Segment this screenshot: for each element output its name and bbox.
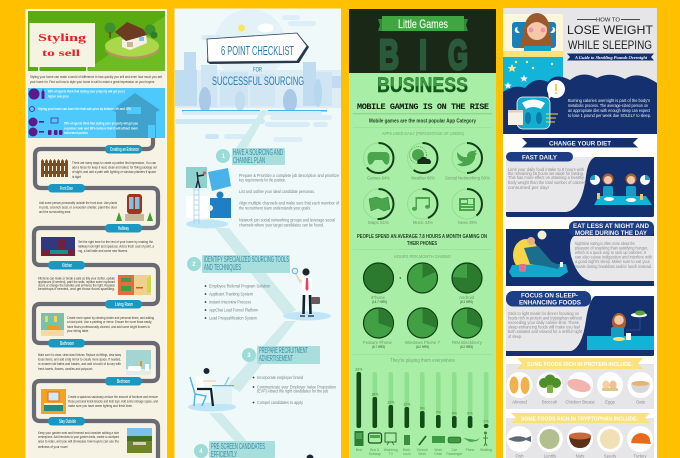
- header dark: Little Games: [398, 17, 448, 31]
- step 1: 1: [222, 154, 226, 160]
- intro copy: Burning calories overnight is part of the body's: [568, 98, 650, 103]
- step 2: AppChat Load Funnel Platform: [209, 308, 258, 312]
- chart: playing everywhere bars: 9%: [420, 406, 426, 410]
- step 4: PRE-SCREEN CANDIDATES: [211, 442, 265, 451]
- section ribbon: CHANGE YOUR DIET: [549, 140, 611, 148]
- chart: playing everywhere bars: 12%: [403, 402, 411, 406]
- chart: playing everywhere bars: Work: [418, 452, 427, 456]
- section labels: Creating an Entrance: [110, 147, 139, 153]
- step 1: key requirements for the position.: [239, 178, 286, 182]
- title: HOW TO: [596, 18, 621, 24]
- card: fast daily: consumed per day!: [508, 185, 549, 190]
- chart: apps used daily rings: Games 64%: [367, 176, 390, 180]
- stats band: Styling your home can lower the final sale price by between 5% and 10%: [38, 106, 131, 111]
- icon: gamepad: [368, 152, 390, 165]
- block: kitchen: [38, 275, 151, 295]
- chart: apps used daily rings: News 39%: [458, 220, 477, 225]
- chart: playing everywhere bars: Work: [434, 448, 443, 452]
- step 2: [187, 255, 290, 320]
- title: A Guide to Shedding Pounds Overnight: [574, 55, 648, 60]
- stats band: higher sale price: [48, 94, 70, 98]
- chart: hours per month pies: (8.3 HRS): [460, 300, 473, 304]
- section labels: Bedroom: [117, 379, 130, 385]
- icon: music note: [412, 197, 430, 211]
- panel: 6 point checklist: [174, 8, 341, 458]
- business title: Mobile games are the most popular App Category: [369, 118, 477, 124]
- card: eat less at night: can also cause indigestion and interfere with: [575, 254, 653, 260]
- block: bathroom: fresh towels, flowers, candles and potpourri.: [38, 366, 93, 371]
- icon: seeds: [600, 429, 620, 449]
- step 2: Lead Prequalification System: [209, 316, 257, 320]
- icon: man with magnifier and briefcase: [283, 268, 331, 320]
- block: entrance fence and text: There are many ways to create a positive first impression. You can: [72, 160, 156, 165]
- panel: styling to sell: [26, 9, 167, 458]
- section labels: Hallway: [118, 226, 129, 232]
- icon: turkey: [631, 433, 651, 444]
- protein foods: Almond: [512, 400, 527, 404]
- protein foods: Broccoli: [542, 400, 557, 404]
- card: eat less at night: pleasure of snacking than satisfying hunger,: [575, 246, 648, 250]
- stats band: a quicker sale and 80% believe that it will attract more: [64, 126, 139, 130]
- step 1: CHANNEL PLAN: [233, 156, 265, 165]
- section labels: Kitchen: [62, 263, 72, 269]
- chart: playing everywhere bars: 7%: [436, 410, 442, 414]
- card: fast daily: [506, 152, 654, 217]
- winding road: [34, 138, 158, 458]
- chart: playing everywhere bars: Desk: [434, 452, 442, 456]
- chart: hours per month pies: (14.7 HRS): [372, 300, 387, 304]
- protein foods: Eggs: [605, 400, 615, 404]
- block: living room: your dining table.: [67, 328, 89, 333]
- chart: hours per month pies: Android: [459, 295, 474, 300]
- step 1: Align multiple channels and make sure that each member of: [239, 200, 340, 206]
- chart: playing everywhere bars: Plane: [466, 448, 474, 452]
- step 3: 3: [247, 353, 251, 359]
- block: stay outside: [38, 428, 152, 453]
- icon: oats: [631, 381, 650, 393]
- step 2: Instant Interview Process: [209, 300, 251, 304]
- chart: playing everywhere bars: Bath-: [403, 448, 411, 452]
- chart: hours per month pies: (6.7 HRS): [372, 345, 385, 349]
- step 3: (EVP) Attract the right candidates for the job: [257, 388, 329, 394]
- card: eat less at night: a good night's sleep. Make sure to eat your: [575, 259, 651, 264]
- intro text: your home for. Find out how to style your home to sell to make a great impression on your buyers.: [30, 79, 155, 84]
- intro copy: [568, 98, 651, 118]
- chart: apps used daily rings: Music 44%: [413, 220, 433, 225]
- block: front door: [39, 194, 153, 221]
- section labels: Front Door: [60, 186, 73, 192]
- business title: MOBILE GAMING IS ON THE RISE: [357, 102, 489, 112]
- step 3: ADVERTISEMENT: [259, 354, 293, 363]
- icon: broccoli: [539, 374, 561, 393]
- protein foods: SOME FOODS RICH IN PROTEIN INCLUDE:: [527, 362, 633, 368]
- heading: hours gaming: [353, 234, 492, 259]
- protein foods: [506, 358, 654, 409]
- block: stay outside: centerpiece. Add benches to your garden beds, create a courtyard: [38, 434, 119, 439]
- block: stay outside: wellness of your room!: [38, 444, 68, 449]
- step 1: List and outline your ideal candidate personas.: [239, 189, 315, 194]
- block: hallway: [41, 237, 155, 256]
- card: sleep-enhancing foods: sleep-enhancing foods will make you feel: [508, 324, 580, 330]
- illustration: sleeping girl: [512, 13, 556, 51]
- header dark: G: [448, 31, 468, 78]
- step 1: Prepare & Prioritize a complete job description and prioritize: [239, 173, 340, 178]
- title: LOSE WEIGHT: [567, 23, 654, 37]
- block: living room: have floors professionally cleaned, and add some bright flowers to: [67, 324, 151, 329]
- intro copy: to lose 1 pound per week due SOLELY to sleep.: [568, 113, 651, 118]
- card: eat less at night: MORE DURING THE DAY: [575, 230, 648, 237]
- step 1: the recruitment team understands your goals.: [239, 206, 311, 210]
- business title: [353, 74, 492, 136]
- intro copy: metabolic process. The average-sized person on: [568, 103, 649, 108]
- block: entrance fence and text: of sight; and add a path with lighting or window planters if space: [72, 169, 157, 174]
- title banner: 6 POINT CHECKLIST: [221, 44, 294, 58]
- block: hallway: hallway look light and spacious. Add a fresh coat of paint, a: [78, 244, 155, 248]
- icons: location row: [354, 431, 488, 446]
- chart: playing everywhere bars: 18%: [371, 392, 379, 396]
- skyline illustration: [175, 9, 341, 142]
- card: sleep-enhancing foods: exceeding your daily calorie limit. These: [508, 320, 580, 325]
- block: stay outside: area to relax, and you will showcase how buyers can use the: [38, 438, 120, 444]
- path ribbons: [209, 110, 296, 458]
- block: bedroom: [41, 389, 159, 414]
- title banner: [207, 33, 309, 88]
- step 3: Communicate your Employer Value Proposition: [257, 384, 337, 390]
- block: hallway: rug, a hall table and some new flowers.: [78, 248, 128, 253]
- icon: chicken breast: [566, 377, 592, 394]
- chart: playing everywhere bars: Subway: [369, 452, 381, 456]
- bubble icon: [547, 80, 565, 99]
- step 3: [242, 346, 337, 405]
- chart: hours per month pies: Feature Phone: [363, 340, 392, 345]
- block: living room: Create more space by clearing clutter and personal items, and adding: [67, 315, 154, 320]
- intro text: [30, 74, 162, 84]
- section labels: Living Room: [115, 302, 133, 308]
- icon: nuts: [569, 436, 591, 448]
- stats band: 88% of agents think that styling your property will get you a: [48, 88, 126, 94]
- block: bathroom: Make sure it is clean; clean stand fixtures. Replace old fittings, clear away: [38, 352, 121, 357]
- title banner: FOR: [253, 68, 262, 74]
- step 3: Incorporate employer brand: [257, 375, 304, 380]
- business title: APPS USED DAILY (PERCENTAGE OF USERS): [382, 131, 464, 136]
- block: entrance fence and text: add a fence for keep it neat, clean and raked; for fixing package out: [72, 164, 158, 170]
- block: living room: a focal point. Use a painting or mirror. Ensure the room flows easily,: [67, 319, 152, 324]
- protein foods: Chicken Breast: [565, 400, 595, 404]
- icon: map: [369, 197, 390, 211]
- block: living room: [41, 313, 154, 336]
- card: sleep-enhancing foods: FOCUS ON SLEEP-: [521, 292, 578, 300]
- chart: playing everywhere bars: TV: [389, 452, 394, 456]
- card: fast daily: FAST DAILY: [522, 154, 558, 162]
- card: eat less at night: which is a quick way to rack up calories. It: [575, 250, 647, 255]
- chart: playing everywhere bars: Walking: [480, 448, 492, 452]
- block: bedroom: those personal knick-knacks and kids toys. Add some storage space, and: [68, 398, 158, 404]
- header: green banner with sign and house: [28, 11, 165, 72]
- card: fast daily: body weight than the total number of calories: [508, 180, 586, 185]
- step 2: Employee Referral Program Solution: [209, 284, 271, 288]
- tryptophan foods: [506, 413, 654, 458]
- title: [567, 18, 654, 60]
- card: fast daily: the remaining 16 hours set aside for fasting.: [508, 171, 584, 176]
- step 2: IDENTIFY SPECIALIZED SOURCING TOOLS: [204, 255, 289, 264]
- chart: playing everywhere bars: [354, 358, 492, 456]
- step 2: AND TECHNIQUES: [204, 263, 241, 272]
- block: entrance fence and text: is tight: [72, 174, 82, 179]
- header: green banner with sign and house: to sell: [42, 49, 81, 59]
- block: bedroom: make sure you have warm lighting and fresh linen.: [68, 403, 133, 408]
- step 1: channels where your target candidates can be found.: [239, 222, 324, 228]
- icon: almonds: [510, 376, 530, 394]
- card: sleep-enhancing foods: ENHANCING FOODS: [519, 300, 581, 306]
- chart: hours per month pies: (6.2 HRS): [416, 345, 429, 349]
- card: eat less at night: meals during breakfast and/or lunch instead.: [575, 264, 652, 269]
- icon: eggs: [602, 380, 618, 391]
- step 4: [194, 441, 314, 458]
- step 1: [216, 148, 340, 228]
- chart: hours per month pies: RIM Blackberry: [452, 340, 483, 345]
- chart: hours per month pies: (6.2 HRS): [460, 345, 473, 349]
- chart: apps used daily rings: [364, 143, 490, 225]
- chart: playing everywhere bars: Bed: [356, 448, 362, 452]
- section labels: Bathroom: [60, 341, 74, 347]
- block: front door: and the surrounding area.: [39, 209, 71, 214]
- illustration: two women at table: [590, 174, 652, 205]
- top section: [503, 8, 657, 134]
- chart: playing everywhere bars: 13%: [387, 400, 395, 404]
- stars: [504, 61, 553, 89]
- block: bathroom: re-enamel old baths and basins, and add a touch of luxury with: [38, 361, 121, 366]
- stats band: [28, 88, 165, 138]
- block: kitchen: appliances (if needed), paint the walls, replace some cupboard: [38, 279, 115, 284]
- card: eat less at night: EAT LESS AT NIGHT AND: [573, 223, 650, 230]
- block: front door: in pots, a bench seat, or a wooden shelter, paint the door: [39, 204, 118, 210]
- heading: hours gaming: THEIR PHONES: [407, 241, 437, 247]
- block: bathroom: [38, 350, 151, 375]
- section labels: [48, 145, 142, 426]
- step 1: Network join social networking groups and leverage social: [239, 218, 335, 222]
- chart: playing everywhere bars: 6%: [467, 412, 473, 416]
- header: green banner with sign and house: Styling: [38, 32, 87, 44]
- block: kitchen: doors or change the handles and enhance the light. Replace: [38, 282, 116, 288]
- chart: apps used daily rings: Weather 60%: [411, 176, 435, 180]
- panel: little games big business: [349, 9, 496, 458]
- block: kitchen: benchtops if needed, and get those floors sparkling.: [38, 286, 115, 291]
- icon: seated worker at desk: [188, 368, 236, 412]
- header dark: I: [419, 31, 427, 78]
- title banner: SUCCESSFUL SOURCING: [212, 76, 304, 88]
- card: sleep-enhancing foods: of sleep.: [508, 334, 522, 339]
- card: sleep-enhancing foods: both satiated and relaxed for a restful night: [508, 329, 583, 334]
- block: kitchen: Kitchens can make or break a sale so tidy your clutter, update: [38, 276, 116, 280]
- chart: playing everywhere bars: Passenger: [446, 452, 463, 456]
- icon: newspaper: [459, 198, 475, 211]
- block: bathroom: loose items, and add a big mirror to create more space. If needed,: [38, 356, 121, 362]
- block: front door: Add some person personality outside the front door. Use plants: [39, 200, 117, 205]
- step 2: 2: [192, 262, 196, 268]
- card: eat less at night: Nighttime eating is often more about the: [575, 241, 635, 246]
- chart: playing everywhere bars: School/: [417, 448, 428, 452]
- chart: apps used daily rings: Maps 51%: [368, 220, 389, 225]
- chart: playing everywhere bars: Car: [452, 448, 458, 452]
- business title: BUSINESS: [377, 74, 468, 97]
- chart: hours per month pies: [353, 263, 492, 354]
- section ribbon: [522, 138, 638, 148]
- icon: fish: [508, 436, 531, 442]
- step 3: PREPARE RECRUITMENT: [259, 346, 308, 355]
- chart: playing everywhere bars: 33%: [355, 368, 363, 372]
- illustration: woman eating: [611, 310, 647, 341]
- block: entrance fence and text: [41, 159, 158, 179]
- icon: weather: [410, 146, 431, 164]
- step 3: Compel candidates to apply: [257, 400, 304, 405]
- card: eat less at night: [506, 221, 654, 286]
- panel: lose weight while sleeping: [503, 8, 657, 458]
- step 2: Applicant Tracking System: [209, 292, 253, 296]
- icon: lentils: [540, 429, 560, 449]
- chart: playing everywhere bars: room: [403, 452, 411, 456]
- card: fast daily: Limit your daily food intake to 8 hours with: [508, 167, 585, 172]
- card: sleep-enhancing foods: [506, 291, 654, 356]
- chart: playing everywhere bars: 2%: [483, 420, 489, 424]
- block: hallway: Set the right tone for the rest of your home by making the: [78, 239, 154, 244]
- chart: hours per month pies: Windows Phone 7: [405, 340, 440, 345]
- chart: hours per month pies: iPhone: [371, 295, 385, 300]
- heading: hours gaming: PEOPLE SPEND AN AVERAGE 7.8 HOURS A MONTH GAMING ON: [357, 234, 487, 240]
- illustration: person on beanbag: [509, 230, 568, 277]
- icon: puzzle and climber: [186, 167, 231, 228]
- heading: hours gaming: HOURS PER MONTH GAMING: [394, 254, 451, 259]
- icon: scale and calendar: [508, 97, 558, 129]
- chart: playing everywhere bars: Watching: [384, 448, 398, 452]
- block: stay outside: Keep your garden neat and trimmed and consider adding a nice: [38, 430, 120, 435]
- intro text: Styling your home can make a world of difference in how quickly you sell and even how much you sell: [30, 74, 162, 79]
- header dark: [349, 9, 496, 78]
- icon: bird: [457, 150, 477, 166]
- card: sleep-enhancing foods: foods rich in protein and tryptophan without: [508, 316, 583, 320]
- card: sleep-enhancing foods: Stick to light meals for dinner focusing on: [508, 311, 580, 316]
- chart: apps used daily rings: Social Networking 50%: [445, 176, 490, 180]
- step 4: 4: [199, 449, 203, 455]
- step 1: HAVE A SOURCING AND: [233, 148, 283, 157]
- protein foods: Oats: [636, 400, 645, 404]
- tryptophan foods: SOME FOODS RICH IN TRYPTOPHAN INCLUDE:: [521, 416, 638, 422]
- stats band: 95% of agents think that styling your property will get you: [64, 120, 138, 126]
- card: fast daily: This has more effect on attaining a healthy: [508, 175, 585, 180]
- chart: playing everywhere bars: 6%: [452, 412, 458, 416]
- block: bedroom: Create a spacious sanctuary-reduce the amount of furniture and remove: [68, 394, 159, 399]
- chart: playing everywhere bars: They're playing them everywhere: [390, 358, 455, 364]
- header dark: B: [379, 31, 399, 78]
- chart: playing everywhere bars: Bus &: [370, 448, 380, 452]
- stats band: interested parties: [64, 130, 89, 135]
- intro copy: an appropriate diet with enough sleep can expect: [568, 108, 651, 113]
- title: WHILE SLEEPING: [568, 38, 652, 52]
- section labels: Stay Outside: [59, 419, 76, 425]
